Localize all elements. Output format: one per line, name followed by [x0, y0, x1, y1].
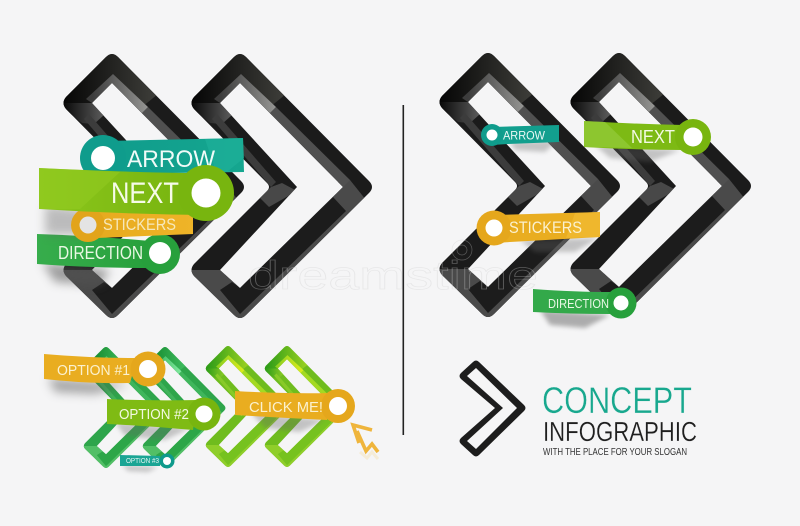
sticker: option 2: OPTION #2: [119, 406, 189, 423]
sticker: option 2: [107, 398, 220, 440]
sticker: click me: CLICK ME!: [249, 399, 323, 416]
arrow: green chevron 1: [81, 345, 170, 471]
divider: [402, 105, 404, 435]
sticker: direction: DIRECTION: [58, 243, 143, 263]
sticker: stickers: STICKERS: [103, 215, 176, 234]
sticker: direction small: DIRECTION: [548, 296, 609, 311]
arrow: large left chevron: [57, 49, 252, 324]
panel: large arrows with stacked stickers: [37, 49, 380, 324]
sticker: stickers: [45, 205, 193, 242]
arrow: lime chevron 4: [262, 344, 351, 470]
sticker: arrow small: [481, 124, 559, 152]
panel: concept logo: [460, 360, 697, 458]
sticker: arrow: ARROW: [127, 146, 215, 173]
arrow: lime chevron 3: [203, 344, 292, 470]
sticker: click me: [235, 389, 355, 432]
arrow: right panel left chevron: [433, 48, 628, 323]
sticker: arrow small: ARROW: [503, 128, 546, 142]
arrow: large right chevron: [185, 49, 380, 324]
sticker: stickers small: [476, 210, 600, 252]
sticker: stickers small: STICKERS: [509, 218, 582, 237]
heading: infographic: INFOGRAPHIC: [543, 416, 697, 447]
heading: concept: CONCEPT: [542, 380, 692, 421]
panel: spaced arrows with stickers: [433, 48, 759, 328]
sticker: next small: NEXT: [631, 127, 675, 147]
watermark: [248, 240, 538, 298]
arrow: green chevron 2: [140, 345, 229, 471]
panel: small green arrows with option stickers: [44, 344, 378, 472]
sticker: next: [39, 165, 234, 221]
slogan: WITH THE PLACE FOR YOUR SLOGAN: [543, 447, 687, 458]
icon: outline chevron: [460, 360, 526, 456]
arrow: right panel right chevron: [564, 48, 759, 323]
sticker: next: NEXT: [111, 177, 179, 210]
sticker: option 3: OPTION #3: [126, 458, 159, 465]
sticker: option 1: OPTION #1: [57, 362, 130, 379]
sticker: option 3: [120, 454, 174, 472]
sticker: option 1: [44, 352, 166, 394]
icon: cursor arrow: [353, 425, 378, 459]
sticker: direction: [37, 234, 180, 285]
watermark: dreamstime: [248, 254, 538, 298]
sticker: arrow: [80, 135, 244, 181]
sticker: next small: [584, 119, 711, 162]
sticker: direction small: [533, 288, 636, 328]
